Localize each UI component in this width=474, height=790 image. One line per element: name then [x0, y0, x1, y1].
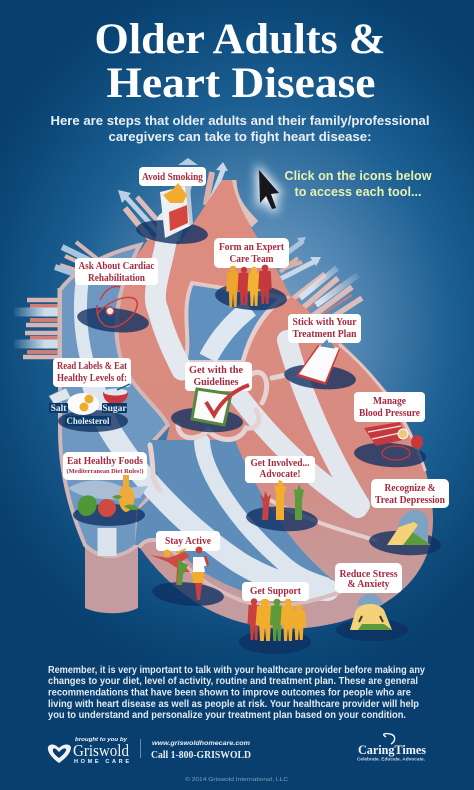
intro text: Here are steps that older adults and their family/professional [50, 113, 430, 128]
guidelines junction [150, 372, 300, 490]
icon: exercising people [150, 546, 209, 600]
action: blood pressure: Blood Pressure [359, 408, 420, 419]
action: treatment plan [283, 314, 361, 392]
action: treatment plan: Stick with Your [292, 317, 357, 328]
action: avoid smoking [135, 167, 209, 247]
logo: Caring Times: Celebrate. Educate. Advocate. [357, 756, 425, 762]
action: cardiac rehabilitation: Rehabilitation [88, 273, 145, 284]
action: stay active: Stay Active [165, 536, 211, 547]
icon: eggs [67, 393, 99, 415]
closing paragraph [48, 665, 425, 721]
action: expert care team: Form an Expert [219, 242, 284, 253]
icon: sugar bowl [103, 384, 130, 404]
icon: salt shaker [49, 388, 71, 404]
action: recognize depression: Recognize & [384, 483, 436, 494]
action: cardiac rehabilitation [75, 258, 158, 336]
closing paragraph: living with heart disease as well as people at risk. Your healthcare provider will help [48, 699, 419, 710]
icon: fish [68, 480, 148, 499]
lower chamber [135, 440, 340, 600]
icon: depressed person [387, 510, 431, 545]
click instruction: to access each tool... [294, 185, 422, 199]
icon: clipboard [296, 340, 340, 385]
right vessel fan and arrows [272, 237, 362, 322]
icon: blood pressure cuff [364, 422, 423, 460]
icon: care team [226, 265, 272, 307]
heart illustration [14, 158, 433, 629]
action: expert care team [214, 238, 289, 312]
action: read labels: Healthy Levels of: [57, 373, 127, 384]
action: get involved [245, 456, 319, 533]
left chamber [60, 245, 168, 556]
cursor icon [259, 170, 279, 209]
icon: cigarette pack [160, 183, 193, 238]
logo: Caring Times [357, 734, 426, 762]
icon: heart logo [48, 744, 71, 763]
click instruction [284, 169, 432, 199]
action: recognize depression [368, 479, 449, 557]
action: stay active [150, 531, 225, 609]
white blood bands [80, 222, 425, 606]
closing paragraph: you to understand and personalize your treatment plan based on your condition. [48, 710, 406, 721]
action: reduce stress: Reduce Stress [340, 569, 398, 580]
action: get involved: Get Involved... [250, 458, 310, 469]
action: read labels: Cholesterol [66, 417, 110, 427]
action: recognize depression: Treat Depression [375, 495, 445, 506]
icon: raised hands [260, 480, 304, 520]
action: read labels [49, 358, 131, 432]
divider [139, 739, 142, 758]
closing paragraph: Remember, it is very important to talk with your healthcare provider before making any [48, 665, 425, 676]
action: read labels: Read Labels & Eat [57, 361, 127, 372]
action: get support: Get Support [250, 586, 301, 597]
action: avoid smoking: Avoid Smoking [142, 172, 204, 183]
action: treatment plan: Treatment Plan [292, 329, 357, 340]
icon: stressed person [350, 594, 392, 630]
heart body [112, 180, 433, 629]
icon: olive oil bottle [112, 475, 140, 512]
action: get support [239, 582, 311, 654]
action: blood pressure [353, 392, 427, 469]
closing paragraph: changes to your diet, level of activity, routine and treatment plan. These are general [48, 676, 418, 687]
aortic stump [85, 545, 138, 613]
action: guidelines: Guidelines [194, 377, 238, 388]
icon: bell pepper [78, 495, 97, 516]
title [94, 16, 386, 107]
copyright: © 2014 Griswold International, LLC [185, 776, 288, 783]
action: read labels: Sugar [102, 404, 127, 414]
left vessel fan [14, 242, 105, 358]
closing paragraph: recommendations that have been shown to improve outcomes for people who are [48, 688, 411, 698]
top arteries and arrows [118, 158, 255, 245]
action: eat healthy foods: Eat Healthy Foods [67, 456, 143, 467]
contact details [151, 740, 251, 761]
intro text [50, 113, 430, 144]
contact details: www.griswoldhomecare.com [152, 740, 250, 747]
icon: apple [98, 499, 116, 517]
action: cardiac rehabilitation: Ask About Cardiac [78, 261, 155, 272]
logo: Griswold Home Care: HOME CARE [74, 759, 129, 765]
click instruction: Click on the icons below [284, 169, 432, 183]
action: reduce stress: & Anxiety [348, 579, 390, 590]
title: Older Adults & [94, 16, 386, 63]
logo: Caring Times: CaringTimes [358, 742, 426, 757]
contact details: Call 1-800-GRISWOLD [151, 750, 251, 761]
icon: support group [248, 598, 306, 641]
action: expert care team: Care Team [230, 254, 274, 265]
icon: checkbox [192, 385, 249, 425]
intro text: caregivers can take to fight heart disease: [108, 129, 372, 144]
action: guidelines [170, 362, 252, 434]
action: blood pressure: Manage [373, 396, 406, 407]
action: reduce stress [335, 563, 408, 641]
action: guidelines: Get with the [189, 365, 243, 376]
action: read labels: Salt [51, 404, 67, 414]
action: get involved: Advocate! [260, 469, 300, 480]
icon: stethoscope [97, 287, 137, 327]
action: eat healthy foods: (Mediterranean Diet Rules!) [66, 468, 144, 475]
logo: Griswold Home Care: Griswold [73, 741, 129, 760]
title: Heart Disease [106, 60, 376, 107]
action: eat healthy foods [63, 452, 148, 526]
logo: Griswold Home Care: brought to you by [75, 737, 128, 743]
center chamber [185, 283, 285, 362]
logo: Griswold Home Care [48, 737, 129, 765]
